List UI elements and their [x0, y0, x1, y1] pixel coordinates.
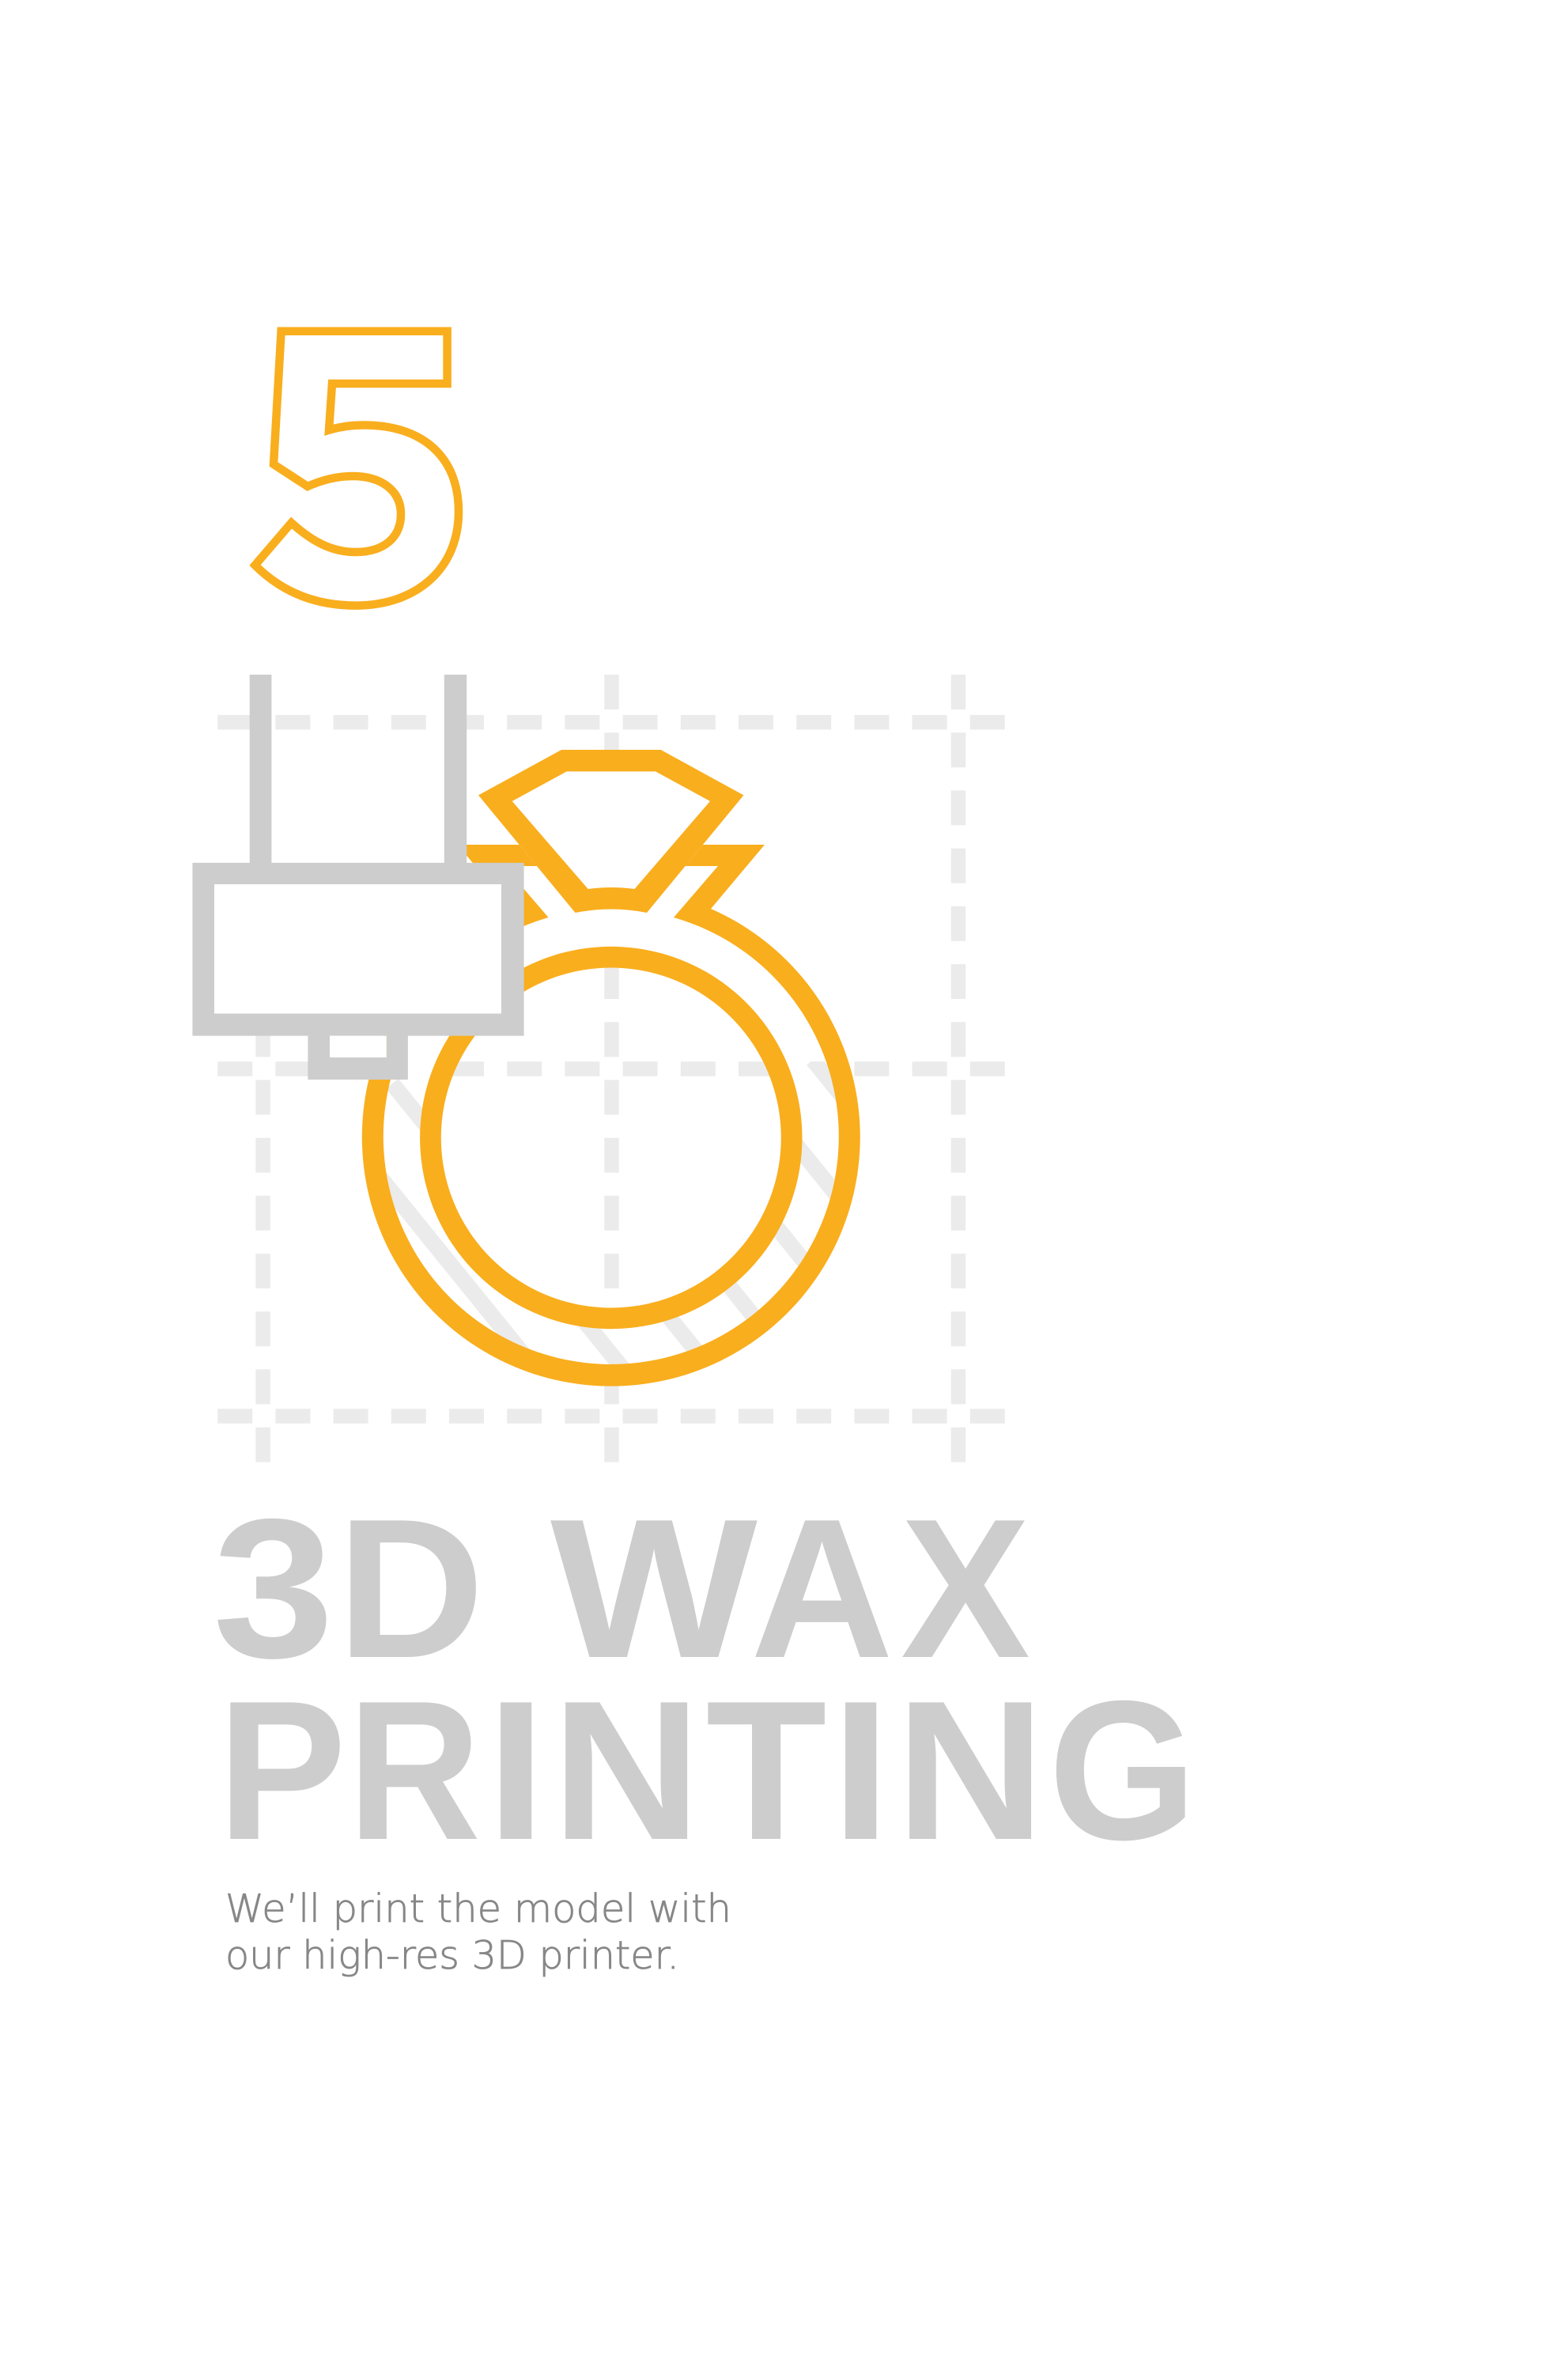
- icon: diamond: [478, 750, 743, 913]
- icon: ring band: [362, 845, 860, 1386]
- heading: X: [901, 1478, 1030, 1700]
- heading: I: [831, 1660, 890, 1882]
- heading: N: [896, 1660, 1045, 1882]
- heading: P: [217, 1660, 346, 1882]
- icon: ring silhouette backing: [362, 750, 860, 1386]
- description text: We’ll print the model with: [225, 1886, 731, 1931]
- heading: D: [337, 1478, 485, 1700]
- heading: R: [348, 1660, 481, 1882]
- infographic step 5: [192, 327, 1185, 1977]
- heading: A: [750, 1478, 894, 1700]
- step number 5: [255, 331, 459, 606]
- heading: T: [706, 1660, 827, 1882]
- diagonal print hatching: [386, 1061, 837, 1364]
- description text: [225, 1886, 731, 1978]
- heading: N: [552, 1660, 701, 1882]
- heading: 3: [213, 1478, 334, 1700]
- description text: our high-res 3D printer.: [225, 1933, 679, 1978]
- heading: I: [486, 1660, 546, 1882]
- icon: printer nozzle: [308, 1028, 408, 1080]
- heading: G: [1048, 1660, 1197, 1882]
- icon: printer rails: [250, 675, 467, 864]
- dashed layout grid: [217, 675, 1005, 1462]
- heading: W: [550, 1478, 758, 1700]
- icon: print head: [192, 863, 524, 1036]
